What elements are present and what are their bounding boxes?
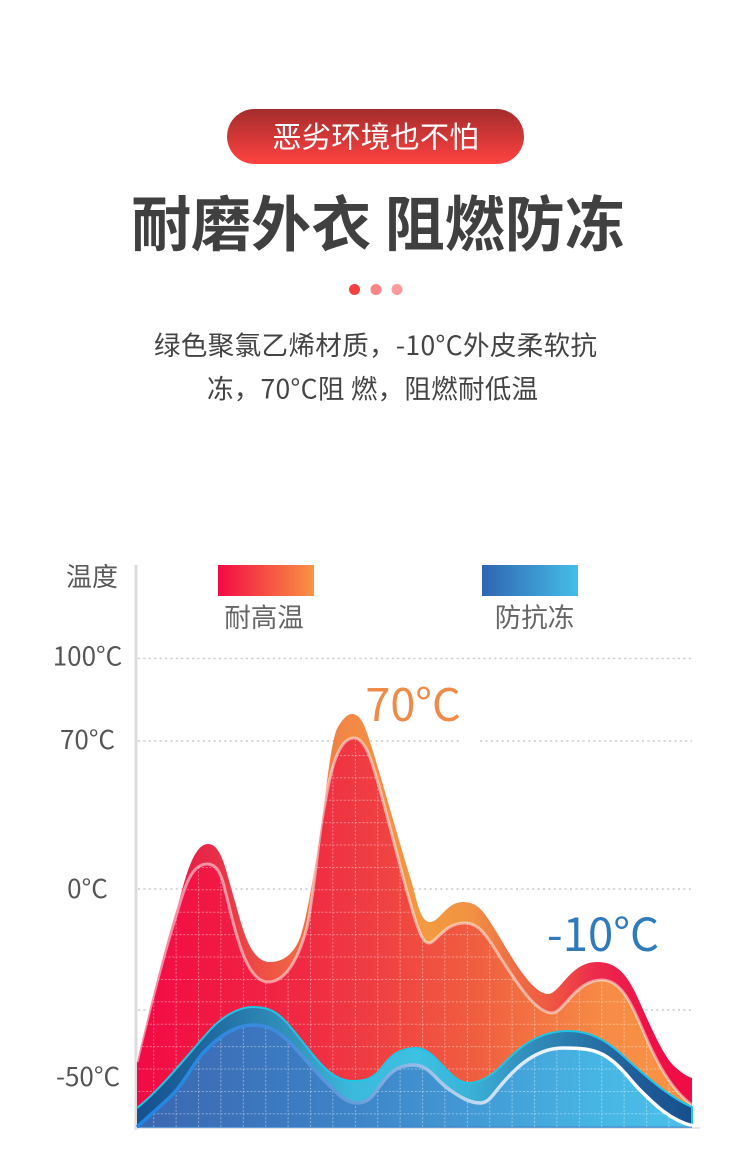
cold-resistant grid overlay (137, 1025, 693, 1127)
y axis labels: 100°C (53, 636, 122, 674)
heat-resistant inner area (137, 738, 692, 1127)
description text (154, 324, 597, 406)
chart: temperature curves (134, 565, 700, 1130)
baseline (137, 1126, 692, 1128)
y axis labels: -50°C (56, 1057, 120, 1094)
callout: -10°C: -10°C (547, 899, 659, 965)
title: 耐磨外衣 阻燃防冻 (131, 177, 625, 264)
badge: harsh environment pill (227, 109, 524, 164)
heat-resistant outer band (137, 714, 692, 1127)
legend: cold resistance (482, 565, 578, 635)
description text: 冻，70°C阻 燃，阻燃耐低温 (207, 368, 538, 406)
y axis title: 温度 (66, 557, 118, 594)
cold-resistant top edge (137, 1007, 692, 1125)
gridlines (138, 658, 692, 1010)
y axis labels: 0°C (67, 869, 108, 906)
y axis labels (53, 636, 122, 1094)
heat-resistant grid overlay (137, 738, 692, 1127)
callout: 70°C: 70°C (365, 669, 461, 734)
axes (134, 565, 700, 1130)
legend: cold resistance: 防抗冻 (495, 596, 574, 635)
legend: heat resistance: 耐高温 (224, 596, 304, 635)
cold-resistant inner area (137, 1025, 693, 1127)
badge: harsh environment pill: 恶劣环境也不怕 (272, 114, 479, 156)
cold-resistant highlight line (137, 1025, 693, 1127)
heat-resistant highlight line (137, 738, 692, 1105)
description text: 绿色聚氯乙烯材质，-10°C外皮柔软抗 (154, 324, 597, 363)
y axis labels: 70°C (60, 720, 115, 757)
legend: heat resistance (218, 565, 314, 635)
cold-resistant outer band (137, 1007, 692, 1127)
decorative three dots (349, 284, 402, 295)
